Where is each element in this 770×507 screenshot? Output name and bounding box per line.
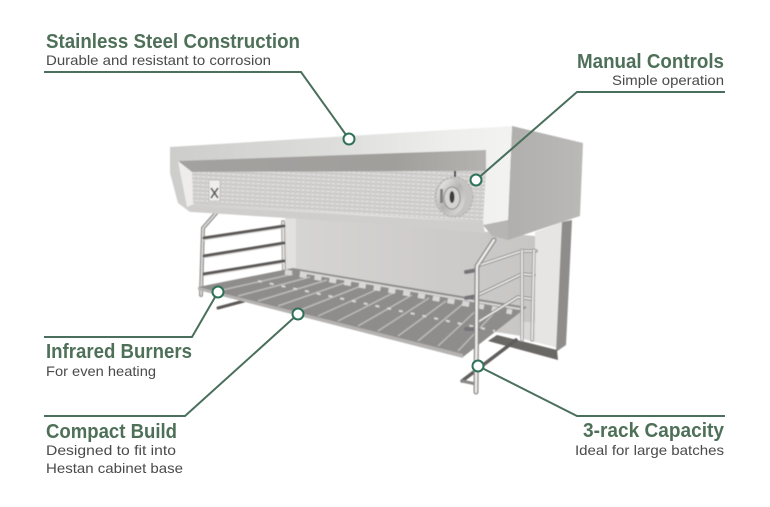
callout: stainless steel construction: Stainless Steel Construction xyxy=(46,31,300,53)
callout: infrared burners xyxy=(46,341,192,379)
callout: compact build: Compact Build xyxy=(46,421,177,443)
recessed band xyxy=(178,150,486,172)
callout: 3-rack capacity: Ideal for large batches xyxy=(575,442,724,458)
callout: manual controls: Simple operation xyxy=(612,72,724,88)
wire rack shelf xyxy=(198,268,527,358)
leader line: compact build xyxy=(44,314,298,416)
callout: manual controls: Manual Controls xyxy=(577,51,724,73)
marker: compact build xyxy=(292,308,304,320)
control knob xyxy=(435,171,473,217)
callout: 3-rack capacity xyxy=(575,420,725,458)
leader line: stainless steel xyxy=(44,72,349,139)
callout: infrared burners: For even heating xyxy=(46,363,156,379)
perforated control panel xyxy=(192,171,486,222)
hood side panel xyxy=(508,126,583,240)
hood front and top xyxy=(170,126,512,225)
callout: 3-rack capacity: 3-rack Capacity xyxy=(583,420,725,442)
callout: stainless steel construction xyxy=(46,31,300,68)
callout: manual controls xyxy=(577,51,724,88)
marker: infrared burners xyxy=(212,286,224,298)
right side wall xyxy=(535,222,562,348)
marker: 3-rack capacity xyxy=(472,360,484,372)
leader line: 3-rack capacity xyxy=(478,366,725,416)
product illustration: salamander broiler xyxy=(170,126,583,392)
leader line: infrared burners xyxy=(44,292,218,337)
callout: compact build: Designed to fit into xyxy=(46,442,176,458)
callout: stainless steel construction: Durable and resistant to corrosion xyxy=(46,52,271,68)
left inner cheek xyxy=(178,161,194,207)
back wall xyxy=(296,215,535,338)
logo badge xyxy=(209,180,220,201)
left rack side rails xyxy=(201,212,284,308)
callout: infrared burners: Infrared Burners xyxy=(46,341,192,363)
right rack side rails xyxy=(462,240,536,392)
callout: compact build xyxy=(46,421,183,476)
leader line: manual controls xyxy=(476,92,725,180)
callout: compact build: Hestan cabinet base xyxy=(46,460,183,476)
marker: manual controls xyxy=(470,174,482,186)
marker: stainless steel xyxy=(344,134,354,144)
lower lip xyxy=(190,206,485,233)
